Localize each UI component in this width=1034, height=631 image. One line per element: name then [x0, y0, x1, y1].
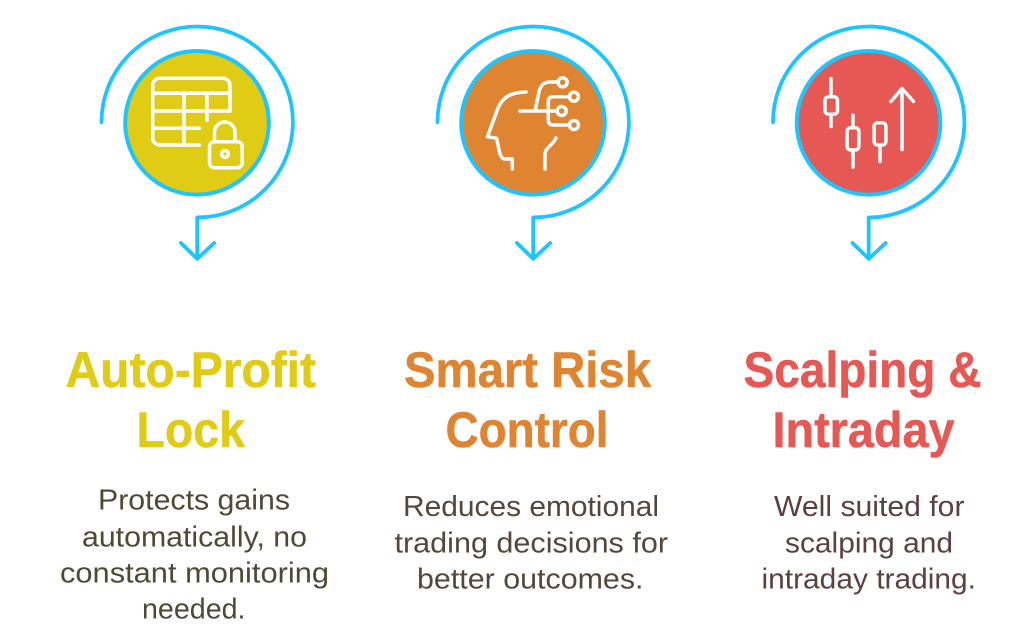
curved arrow: auto-profit lock: [101, 27, 293, 259]
curved arrow: scalping and intraday: [773, 27, 964, 259]
panel: auto-profit lock: [60, 27, 329, 626]
text: scalping and intraday description: [762, 491, 976, 596]
icon: table with padlock: [153, 78, 242, 168]
text: auto-profit lock description: automatically, no: [82, 522, 307, 554]
heading: scalping and intraday: [744, 341, 982, 458]
text: smart risk control description: Reduces emotional: [403, 491, 659, 523]
icon circle: red: [797, 51, 940, 195]
panel: smart risk control: [394, 27, 668, 596]
heading: auto-profit lock: Auto-Profit: [66, 341, 316, 398]
text: auto-profit lock description: Protects gains: [98, 484, 290, 516]
text: smart risk control description: [394, 491, 668, 596]
text: auto-profit lock description: constant monitoring: [60, 558, 329, 590]
heading: scalping and intraday: Intraday: [772, 401, 954, 458]
text: scalping and intraday description: intraday trading.: [762, 564, 976, 596]
heading: auto-profit lock: Lock: [136, 401, 246, 458]
text: scalping and intraday description: Well suited for: [774, 491, 965, 523]
icon: head with circuit nodes: [488, 78, 578, 169]
text: auto-profit lock description: needed.: [142, 594, 246, 626]
text: scalping and intraday description: scalping and: [785, 528, 953, 560]
heading: auto-profit lock: [66, 341, 316, 458]
text: smart risk control description: better outcomes.: [417, 564, 644, 596]
icon: candlesticks with up arrow: [825, 78, 914, 167]
text: auto-profit lock description: [60, 484, 329, 626]
heading: smart risk control: [404, 341, 652, 458]
curved arrow: smart risk control: [437, 27, 629, 259]
icon circle: yellow: [125, 51, 269, 195]
heading: scalping and intraday: Scalping &: [744, 341, 982, 398]
heading: smart risk control: Smart Risk: [404, 341, 652, 398]
text: smart risk control description: trading decisions for: [394, 528, 668, 560]
panel: scalping and intraday: [744, 27, 982, 596]
heading: smart risk control: Control: [446, 401, 608, 458]
icon circle: orange: [461, 51, 605, 195]
